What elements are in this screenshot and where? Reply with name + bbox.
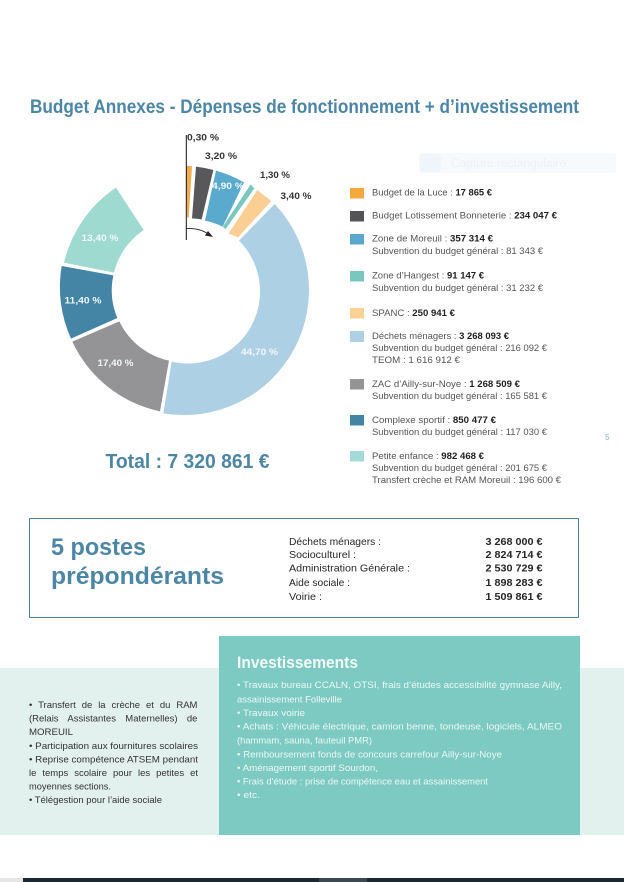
legend: Zone d'Hangest: Zone d’Hangest : 91 147 € xyxy=(372,270,484,280)
heading: 5 postes xyxy=(51,534,146,561)
percent labels: 0,30 % xyxy=(187,132,220,144)
percent labels: 11,40 % xyxy=(64,296,102,306)
text block: left bullet list: MOREUIL xyxy=(29,727,73,738)
slice: Budget Lotissement Bonneterie xyxy=(192,167,213,219)
page number: 5 xyxy=(605,433,610,442)
text block: left bullet list: • Transfert de la crèche et du RAM xyxy=(29,700,198,711)
list labels: Aide sociale : xyxy=(289,577,350,589)
legend: SPANC: SPANC : 250 941 € xyxy=(372,308,455,318)
text block: left bullet list: • Participation aux fournitures scolaires xyxy=(29,741,198,752)
legend: Déchets ménagers: Déchets ménagers : 3 268 093 € xyxy=(372,331,509,341)
legend: Petite enfance: Subvention du budget général : 201 675 € xyxy=(372,463,547,473)
title: Budget Annexes - Dépenses de fonctionnement + d’investissement xyxy=(30,97,580,118)
investment list: (hammam, sauna, fauteuil PMR) xyxy=(237,736,372,746)
list values xyxy=(486,537,543,603)
total: Total : 7 320 861 € xyxy=(106,451,270,473)
investment list: • Remboursement fonds de concours carrefour Ailly-sur-Noye xyxy=(237,750,502,760)
donut chart xyxy=(60,132,312,415)
rotation arrow xyxy=(186,228,213,237)
percent labels: 3,40 % xyxy=(280,191,312,202)
text block: left bullet list: • Télégestion pour l’aide sociale xyxy=(29,795,162,806)
legend: Budget Lotissement Bonneterie: Budget Lotissement Bonneterie : 234 047 € xyxy=(372,210,557,220)
panel: 5 postes prépondérants xyxy=(30,518,578,618)
list values: 2 530 729 € xyxy=(486,564,543,574)
list values: 2 824 714 € xyxy=(486,550,543,561)
legend: Complexe sportif: Subvention du budget général : 117 030 € xyxy=(372,427,547,437)
text block: left bullet list: (Relais Assistantes Maternelles) de xyxy=(29,714,197,724)
list labels: Déchets ménagers : xyxy=(289,536,381,548)
list labels: Voirie : xyxy=(289,591,322,603)
percent labels: 4,90 % xyxy=(212,181,245,192)
slice: ZAC d'Ailly-sur-Noye xyxy=(72,321,169,411)
slice: Complexe sportif xyxy=(60,266,117,339)
percent labels xyxy=(64,132,312,369)
investment list: • Frais d’étude : prise de compétence eau et assainissement xyxy=(237,776,488,788)
text block: left bullet list: le temps scolaire pour les petites et xyxy=(29,768,198,779)
legend xyxy=(350,188,561,485)
percent labels: 17,40 % xyxy=(98,358,134,369)
percent labels: 3,20 % xyxy=(205,151,238,162)
legend: Déchets ménagers: Subvention du budget général : 216 092 € xyxy=(372,343,547,353)
legend: Zone d'Hangest xyxy=(350,270,543,293)
legend: Zone de Moreuil xyxy=(350,234,543,256)
legend: ZAC d'Ailly-sur-Noye: ZAC d’Ailly-sur-Noye : 1 268 509 € xyxy=(372,379,520,389)
legend: Zone de Moreuil: Subvention du budget général : 81 343 € xyxy=(372,246,543,256)
investment list: • Travaux bureau CCALN, OTSI, frais d’études accessibilité gymnase Ailly, xyxy=(237,680,562,691)
footer bar xyxy=(0,878,624,882)
list labels xyxy=(289,536,410,603)
legend: Déchets ménagers: TEOM : 1 616 912 € xyxy=(372,355,460,365)
list values: 3 268 000 € xyxy=(486,537,543,548)
investment list: assainissement Folleville xyxy=(237,694,342,706)
legend: Petite enfance xyxy=(350,451,561,485)
investment list: • Achats : Véhicule électrique, camion benne, tondeuse, logiciels, ALMEO xyxy=(237,722,562,732)
heading xyxy=(51,534,224,590)
legend: Complexe sportif: Complexe sportif : 850 477 € xyxy=(372,415,496,425)
slice: Zone de Moreuil xyxy=(205,171,244,227)
legend: Complexe sportif xyxy=(350,415,547,437)
ghost screen capture tooltip xyxy=(419,153,616,173)
text block: left bullet list: • Reprise compétence ATSEM pendant xyxy=(29,754,198,766)
legend: Petite enfance: Petite enfance : 982 468 € xyxy=(372,451,484,461)
start axis line xyxy=(185,135,187,240)
text block: left bullet list: moyennes sections. xyxy=(29,782,111,792)
slice: Petite enfance xyxy=(64,188,144,273)
legend: Petite enfance: Transfert crèche et RAM Moreuil : 196 600 € xyxy=(372,475,561,485)
slice: Zone d'Hangest xyxy=(223,184,254,229)
slice: Déchets ménagers xyxy=(163,204,309,415)
legend: Zone d'Hangest: Subvention du budget général : 31 232 € xyxy=(372,283,543,293)
legend: Zone de Moreuil: Zone de Moreuil : 357 314 € xyxy=(372,234,493,244)
percent labels: 1,30 % xyxy=(260,170,291,181)
pale band xyxy=(0,668,624,835)
heading: Investissements xyxy=(237,654,358,672)
heading: prépondérants xyxy=(51,563,224,590)
investment list: • Travaux voirie xyxy=(237,708,305,719)
panel: Investissements xyxy=(219,636,580,835)
legend: ZAC d'Ailly-sur-Noye xyxy=(350,379,547,401)
list values: 1 509 861 € xyxy=(486,592,543,603)
list values: 1 898 283 € xyxy=(486,578,543,589)
text block: left bullet list xyxy=(29,700,198,806)
percent labels: 44,70 % xyxy=(241,347,279,358)
legend: Déchets ménagers xyxy=(350,331,547,365)
investment list: • etc. xyxy=(237,790,260,801)
list labels: Administration Générale : xyxy=(289,562,410,574)
slice: Budget de la Luce xyxy=(186,166,192,218)
investment list xyxy=(237,680,562,801)
legend: ZAC d'Ailly-sur-Noye: Subvention du budget général : 165 581 € xyxy=(372,391,547,401)
ghost screen capture tooltip: Capture rectangulaire xyxy=(451,158,566,170)
slice: SPANC xyxy=(229,190,271,237)
percent labels: 13,40 % xyxy=(82,233,119,244)
list labels: Socioculturel : xyxy=(289,549,356,561)
investment list: • Aménagement sportif Sourdon, xyxy=(237,763,378,774)
legend: Budget de la Luce: Budget de la Luce : 17 865 € xyxy=(372,188,492,198)
